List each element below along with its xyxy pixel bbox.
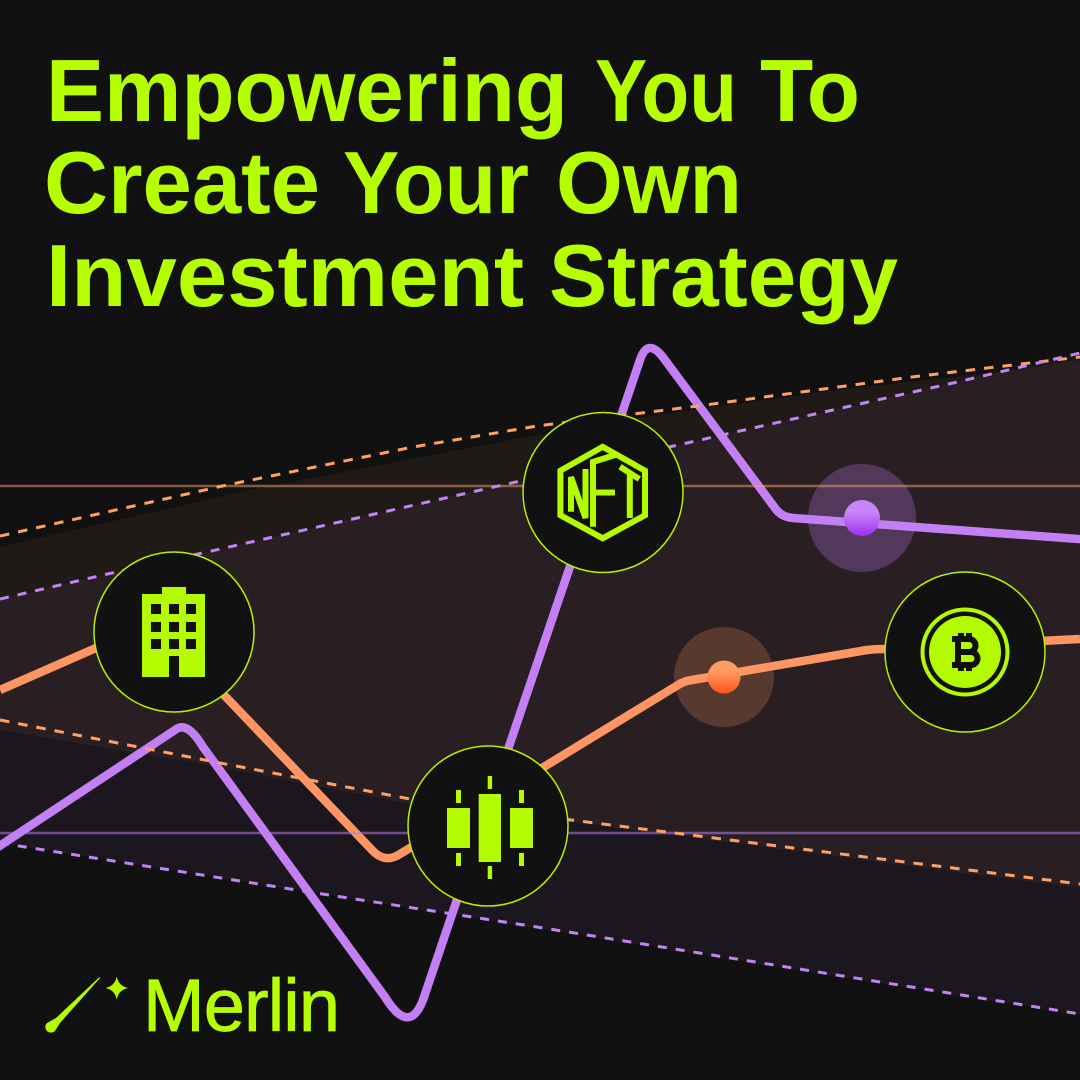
orange dashed lower bound	[0, 720, 1080, 884]
icon: candlestick chart	[408, 746, 568, 906]
icon: building	[94, 552, 254, 712]
purple price line	[0, 348, 1080, 1017]
purple range band	[0, 354, 1080, 1015]
icon: sparkle	[106, 976, 128, 1000]
icon: bitcoin coin	[885, 572, 1045, 732]
purple dashed upper bound	[0, 353, 1080, 599]
orange upper horizontal line	[0, 485, 1080, 487]
purple lower horizontal line	[0, 832, 1080, 834]
orange range band	[0, 360, 1080, 888]
title	[44, 41, 898, 325]
title: Own	[556, 133, 742, 232]
orange dashed upper bound	[0, 357, 1080, 536]
title: You	[595, 41, 737, 140]
halo: orange marker	[674, 627, 774, 727]
logo: Merlin wand and wordmark	[45, 964, 340, 1047]
title: Investment	[46, 226, 524, 325]
orange marker dot	[708, 660, 740, 694]
title: Your	[343, 133, 529, 232]
purple dashed lower bound	[0, 843, 1080, 1014]
title: Create	[44, 133, 320, 232]
wordmark: Merlin	[143, 964, 340, 1047]
icon: NFT hexagon	[523, 412, 683, 572]
title: Empowering	[46, 41, 568, 140]
title: To	[760, 41, 860, 140]
title: Strategy	[549, 226, 898, 325]
purple marker dot	[844, 500, 880, 536]
orange price line	[0, 620, 1080, 858]
icon: magic wand	[45, 977, 100, 1033]
halo: purple marker	[808, 464, 916, 572]
